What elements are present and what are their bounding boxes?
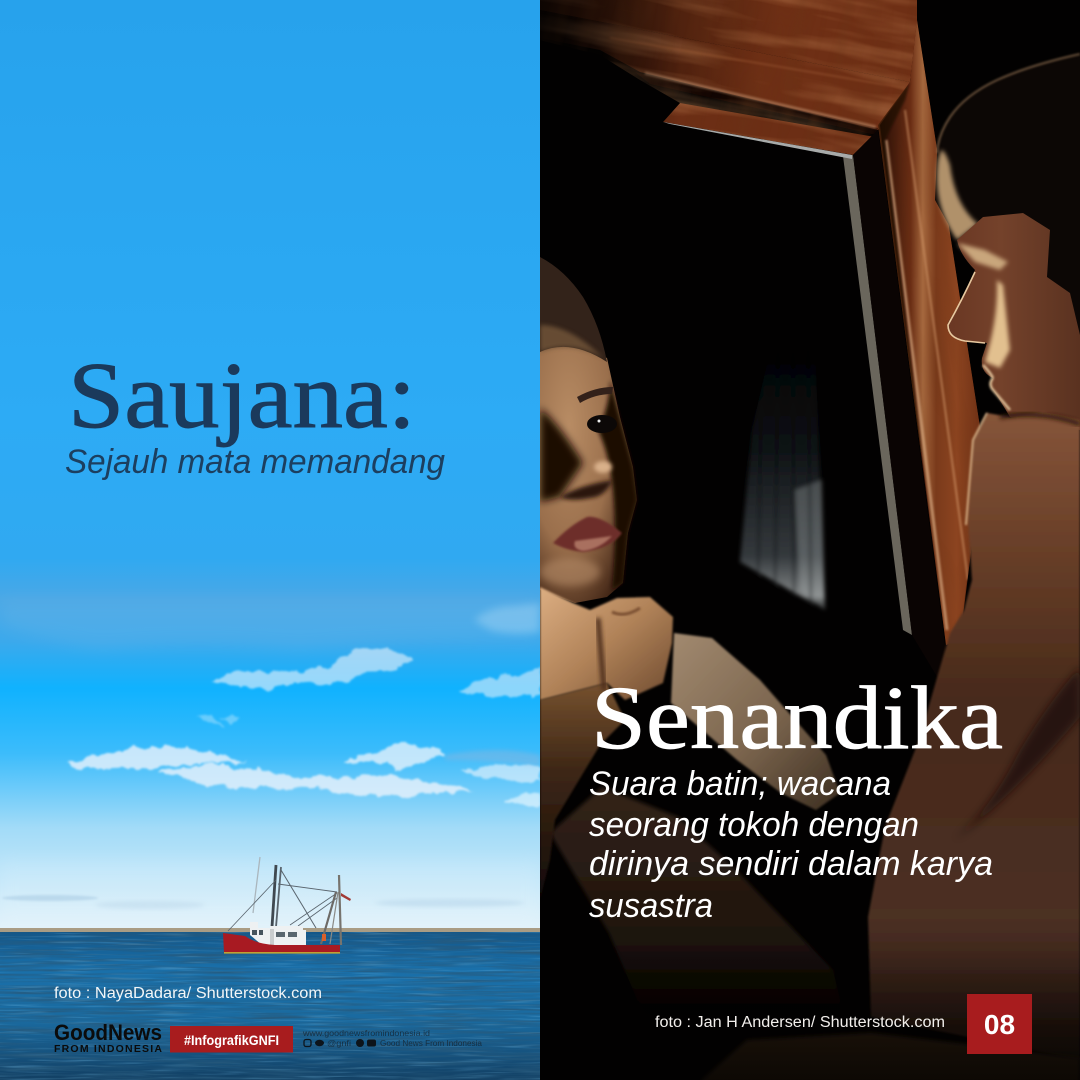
bottom shading — [702, 978, 1080, 1080]
heading: Senandika: Senandika — [591, 669, 1003, 768]
frame top wood — [540, 0, 917, 155]
website and social media handles — [303, 1030, 482, 1048]
reflection of boy's face — [540, 257, 637, 603]
definition of Senandika: dirinya sendiri dalam karya — [589, 845, 993, 883]
dark background — [540, 0, 1080, 1080]
mirror frame — [481, 0, 1079, 690]
hashtag badge — [170, 1026, 293, 1052]
sky background — [0, 0, 540, 930]
photo credit: Jan H Andersen: foto : Jan H Andersen/ Shutterstock.com — [655, 1014, 945, 1031]
logo: GoodNews From Indonesia: GoodNews — [54, 1020, 162, 1045]
page number badge: 08 — [984, 1009, 1015, 1040]
face — [947, 213, 1080, 430]
heading: Saujana: Saujana: — [68, 344, 416, 448]
definition of Senandika: seorang tokoh dengan — [589, 806, 919, 844]
panel: Saujana sky and sea photo — [0, 0, 540, 1080]
hashtag badge: #InfografikGNFI — [184, 1033, 279, 1048]
hair — [935, 55, 1080, 335]
boy in foreground — [702, 54, 1080, 1080]
page number badge — [967, 994, 1032, 1054]
website and social media handles: www.goodnewsfromindonesia.id — [302, 1028, 430, 1038]
photo credit: NayaDadara: foto : NayaDadara/ Shutterstock.com — [54, 985, 322, 1002]
website and social media handles: Good News From Indonesia — [380, 1039, 483, 1048]
far shore — [0, 928, 540, 932]
definition of Senandika — [589, 765, 993, 925]
definition of Senandika: susastra — [589, 887, 713, 925]
definition of Senandika: Suara batin; wacana — [589, 765, 891, 803]
inner mirror edge — [843, 155, 912, 635]
subheading: definition of Saujana: Sejauh mata memandang — [65, 443, 445, 481]
curtain reflection — [740, 340, 825, 610]
logo: GoodNews From Indonesia — [54, 1024, 162, 1052]
clouds — [0, 600, 540, 926]
icon: red fishing boat — [223, 857, 351, 954]
sea — [0, 932, 540, 1080]
reflection of hands and sleeve — [540, 586, 841, 986]
logo: GoodNews From Indonesia: FROM INDONESIA — [54, 1043, 162, 1055]
frame side column — [878, 20, 980, 645]
arm and hand — [868, 412, 1080, 1060]
website and social media handles: @gnfi — [327, 1039, 351, 1048]
panel: Senandika mirror portrait photo — [481, 0, 1080, 1080]
